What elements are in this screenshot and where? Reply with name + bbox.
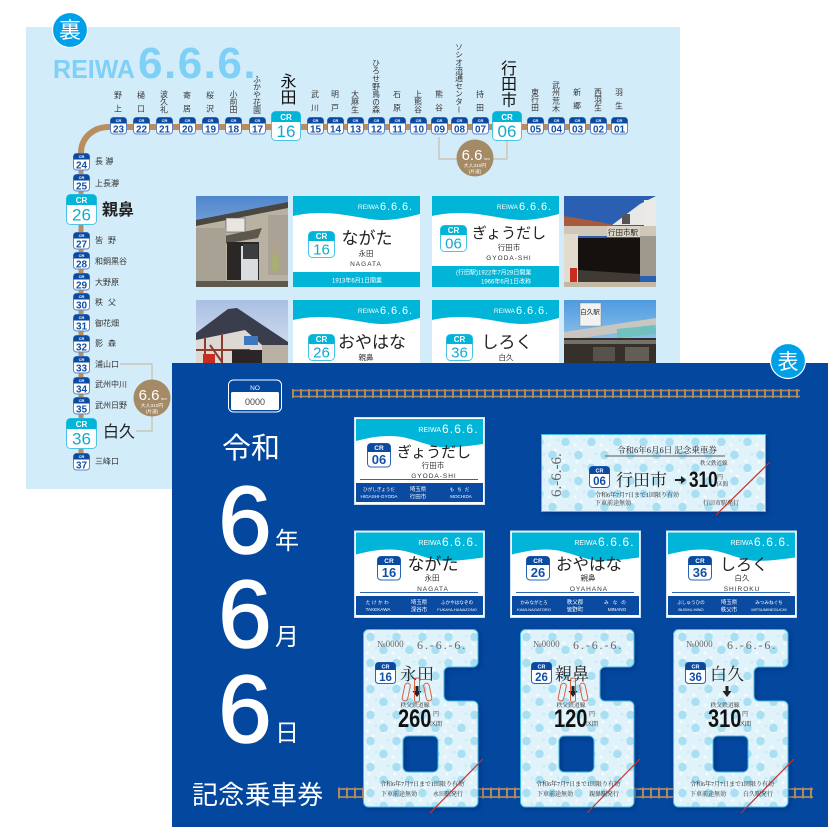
number box <box>228 380 282 412</box>
station badges: left column: CR <box>79 175 84 180</box>
station sign: Nagata: 埼玉県 <box>411 598 428 606</box>
station names: top row: 明戸 <box>330 90 340 118</box>
ticket: Shiroku six-shaped: 下車前途無効 <box>690 790 726 798</box>
ticket: Nagata six-shaped: 令和6年7月7日まで1回限り有効 <box>380 780 464 788</box>
station sign: Nagata: CR <box>384 558 394 565</box>
station badges: top row: CR <box>596 118 601 123</box>
station badges: left column: 24 <box>76 160 87 172</box>
station sign: Oyahana: おやはな <box>556 555 622 574</box>
title: 令和6年6月6日 記念乗車券: 記念乗車券 <box>192 780 324 810</box>
station sign: Oyahana: 親鼻 <box>580 572 596 582</box>
photo: Nagata station <box>196 196 288 287</box>
station sign: Nagata: ながた <box>408 555 458 574</box>
station sign: Oyahana <box>510 531 640 618</box>
station sign: Shiroku: MITSUMINEGUCHI <box>751 607 787 612</box>
ticket: Shiroku six-shaped: 区間 <box>739 720 751 728</box>
station badges: left column: CR <box>79 336 84 341</box>
ticket: Gyodashi long ticket: 区間 <box>717 480 729 488</box>
station names: left column: 白久 <box>103 423 135 441</box>
station card: Nagata: CR <box>316 232 327 241</box>
station card: Nagata: 16 <box>313 242 330 258</box>
station names: top row: 東行田 <box>530 87 540 112</box>
station badges: top row: 21 <box>159 124 170 136</box>
callout: 6.6 km fare, Shiroku <box>120 364 170 431</box>
station names: top row: 上熊谷 <box>413 90 422 114</box>
station names: top row: 桜沢 <box>205 90 214 119</box>
icon: back side badge 裏: 裏 <box>59 18 81 43</box>
ticket: Shiroku six-shaped: 秩父鉄道線 <box>710 701 740 709</box>
station sign: Gyodashi: 行田市 <box>410 492 427 500</box>
callout: 6.6 km fare, Shiroku: km <box>161 396 167 401</box>
station names: top row: 武州荒木 <box>551 80 560 113</box>
station badges: top row <box>110 112 628 141</box>
photo: Gyodashi station <box>564 196 656 287</box>
icon: back side badge 裏 <box>52 12 88 48</box>
station badges: left column: CR <box>79 454 84 459</box>
station names: left column: 大野原 <box>95 277 119 287</box>
ticket: Nagata six-shaped: 区間 <box>430 720 442 728</box>
station badges: left column: 29 <box>76 280 87 292</box>
callout: 6.6 km fare, Gyoda: 6.6 <box>462 147 482 164</box>
station card: Oyahana: 6.6.6. <box>380 305 413 317</box>
ticket: Nagata six-shaped: CR <box>382 664 389 670</box>
station sign: Nagata: 16 <box>382 565 396 580</box>
ticket: Gyodashi long ticket: 下車前途無効 <box>595 499 631 507</box>
station sign: Gyodashi: CR <box>374 445 384 452</box>
station badges: top row: CR <box>280 113 292 122</box>
ticket: Gyodashi long ticket: 行田市 <box>616 471 667 490</box>
station names: top row: 熊谷 <box>434 89 444 118</box>
ticket: Gyodashi long ticket: 秩父鉄道線 <box>700 459 728 467</box>
station names: top row <box>113 43 624 119</box>
station sign: Shiroku: CR <box>695 558 705 565</box>
ticket: Nagata six-shaped: 永田 <box>400 665 434 684</box>
station badges: left column: CR <box>79 274 84 279</box>
station badges: top row: 07 <box>475 124 486 136</box>
station names: top row: 武川 <box>310 89 320 118</box>
station sign: Oyahana: REIWA <box>574 540 597 547</box>
ticket: Shiroku six-shaped <box>674 630 794 813</box>
station sign: Gyodashi: MOCHIDA <box>450 494 473 499</box>
station badges: top row: CR <box>617 118 622 123</box>
station names: left column: 御花畑 <box>95 318 119 328</box>
station names: top row: 新郷 <box>572 88 582 116</box>
station sign: Oyahana: 6.6.6. <box>598 535 635 549</box>
track: top <box>292 390 800 396</box>
station sign: Shiroku: 秩父市 <box>721 606 738 614</box>
ticket: Shiroku six-shaped: 310 <box>708 705 741 733</box>
title: 令和6年6月6日 記念乗車券: 日 <box>275 720 299 747</box>
station sign: Nagata: NAGATA <box>417 586 449 593</box>
station sign: Gyodashi: 6.6.6. <box>442 422 479 436</box>
station sign: Gyodashi: ひがしぎょうだ <box>363 486 395 493</box>
station badges: top row: 22 <box>136 124 147 136</box>
station card: Gyodashi: 6.6.6. <box>519 201 552 213</box>
station badges: top row: CR <box>395 118 400 123</box>
ticket: Nagata six-shaped: 円 <box>433 711 439 718</box>
heading: REIWA 6.6.6.: REIWA <box>53 54 135 84</box>
heading: REIWA 6.6.6.: 6.6.6. <box>138 39 257 88</box>
station card: Shiroku: 36 <box>451 344 468 362</box>
station badges: top row: CR <box>457 118 462 123</box>
station sign: Shiroku: 埼玉県 <box>721 598 738 606</box>
ticket: Oyahana six-shaped <box>520 630 640 813</box>
station badges: top row: 11 <box>392 124 403 136</box>
station badges: left column: 28 <box>76 260 87 270</box>
station card: Nagata: 6.6.6. <box>380 201 413 213</box>
station badges: left column: 35 <box>76 404 87 416</box>
station sign: Oyahana: かみながとろ <box>520 599 548 606</box>
ticket: Gyodashi long ticket: 令和6年6月6日 記念乗車券 <box>617 445 717 455</box>
station card: Shiroku <box>432 300 559 364</box>
title: 令和6年6月6日 記念乗車券: 6 <box>218 656 272 763</box>
panel: back side <box>26 12 680 489</box>
station card: Nagata: ながた <box>342 229 392 248</box>
number box: 0000 <box>245 397 265 407</box>
callout: 6.6 km fare, Gyoda <box>439 137 507 176</box>
station card: Shiroku: CR <box>454 335 465 344</box>
ticket: Oyahana six-shaped: 令和6年7月7日まで1回限り有効 <box>536 780 620 788</box>
station names: top row: ひろせ野鳥の森 <box>371 59 380 115</box>
station names: top row: 小前田 <box>229 90 238 114</box>
ticket: Nagata six-shaped: 永田駅発行 <box>433 790 463 798</box>
station names: top row: ふかや花園 <box>252 75 262 115</box>
station sign: Nagata: REIWA <box>418 540 441 547</box>
station badges: top row: CR <box>208 118 213 123</box>
ticket: Oyahana six-shaped: 6.-6.-6. <box>573 638 623 652</box>
station sign: Shiroku: みつみねぐち <box>755 600 783 606</box>
callout: 6.6 km fare, Shiroku: 大人310円 <box>141 402 163 409</box>
station sign: Gyodashi: HIGASHI-GYODA <box>360 494 398 499</box>
station badges: left column: CR <box>79 154 84 159</box>
ticket: Gyodashi long ticket: 円 <box>717 474 723 481</box>
station badges: left column: 27 <box>76 240 87 250</box>
photo: Shiroku station <box>564 300 656 364</box>
station names: left column: 武州日野 <box>95 400 127 410</box>
station card: Oyahana: CR <box>316 335 327 344</box>
station badges: top row: CR <box>185 118 190 123</box>
station sign: Shiroku: 白久 <box>734 572 750 582</box>
station sign: Shiroku: REIWA <box>730 540 753 547</box>
ticket: Gyodashi long ticket: CR <box>596 468 603 474</box>
station names: top row: 行田市 <box>498 60 516 108</box>
station badges: left column: CR <box>79 398 84 403</box>
station sign: Oyahana: CR <box>533 558 543 565</box>
heading: REIWA 6.6.6. <box>53 39 257 88</box>
ticket: Oyahana six-shaped: 親鼻 <box>555 665 589 684</box>
station badges: top row: 19 <box>205 124 216 136</box>
title: 令和6年6月6日 記念乗車券: 年 <box>275 528 299 555</box>
ticket: Shiroku six-shaped: №0000 <box>686 639 713 649</box>
station badges: left column: CR <box>76 196 87 205</box>
station names: left column: 武州中川 <box>95 379 127 389</box>
ticket: Gyodashi long ticket: 行田市駅発行 <box>703 499 739 507</box>
station badges: top row: 16 <box>277 122 295 141</box>
station sign: Nagata: たけかわ <box>366 599 390 606</box>
track: bottom <box>338 789 813 797</box>
station sign: Shiroku: 36 <box>693 565 707 580</box>
station badges: left column: 26 <box>72 206 91 224</box>
ticket: Nagata six-shaped: 16 <box>379 672 392 684</box>
station names: left column: 浦山口 <box>95 359 119 369</box>
station names: top row: 石原 <box>392 90 402 118</box>
station names: top row: 波久礼 <box>159 89 168 114</box>
station names: left column: 上長瀞 <box>95 178 119 188</box>
station card: Nagata: REIWA <box>358 204 380 211</box>
station badges: top row: CR <box>437 118 442 123</box>
station names: left column: 皆野 <box>95 236 121 245</box>
station badges: top row: 18 <box>228 124 239 136</box>
ticket: Nagata six-shaped: №0000 <box>377 639 404 649</box>
station badges: left column: 37 <box>76 460 87 472</box>
station badges: top row: CR <box>416 118 421 123</box>
ticket: Shiroku six-shaped: 白久 <box>710 665 744 684</box>
ticket: Oyahana six-shaped: 親鼻駅発行 <box>589 790 619 798</box>
station card: Nagata <box>293 196 420 287</box>
station badges: top row: CR <box>255 118 260 123</box>
station sign: Oyahana: KAMI-NAGATORO <box>517 607 551 612</box>
photo: Gyodashi station: 行田市駅 <box>608 227 638 237</box>
station badges: left column <box>66 154 96 472</box>
station sign: Oyahana: 秩父郡 <box>567 598 584 606</box>
station badges: top row: 23 <box>113 124 124 136</box>
station card: Nagata: NAGATA <box>350 261 382 268</box>
icon: front side badge 表: 表 <box>778 351 798 374</box>
station card: Gyodashi: ぎょうだし <box>472 225 546 242</box>
station sign: Nagata <box>354 531 484 618</box>
station badges: left column: CR <box>79 357 84 362</box>
station sign: Gyodashi: GYODA-SHI <box>411 473 457 480</box>
station sign: Nagata: TAKEKAWA <box>366 607 391 612</box>
station badges: top row: 15 <box>310 124 321 136</box>
station sign: Nagata: FUKAYA-HANAZONO <box>437 607 477 612</box>
ticket: Oyahana six-shaped: 円 <box>589 711 595 718</box>
station card: Gyodashi: CR <box>448 226 459 235</box>
station sign: Nagata: 永田 <box>424 572 440 582</box>
station card: Oyahana: REIWA <box>358 308 380 315</box>
station badges: left column: 31 <box>76 322 87 332</box>
ticket: Gyodashi long ticket: 06 <box>593 476 606 488</box>
number box: NO <box>250 385 260 392</box>
ticket: Gyodashi long ticket <box>542 434 770 515</box>
station names: top row: 大麻生 <box>350 89 360 113</box>
station card: Gyodashi <box>432 196 559 287</box>
station badges: top row: CR <box>116 118 121 123</box>
station badges: top row: CR <box>478 118 483 123</box>
ticket: Oyahana six-shaped: CR <box>538 664 545 670</box>
station badges: top row: 03 <box>572 124 583 136</box>
station badges: top row: 20 <box>182 124 193 136</box>
callout: 6.6 km fare, Shiroku: 6.6 <box>139 387 159 404</box>
ticket: Oyahana six-shaped: 秩父鉄道線 <box>556 701 586 709</box>
station card: Shiroku: 白久 <box>498 352 514 362</box>
station badges: top row: CR <box>554 118 559 123</box>
station names: top row: 野上 <box>113 91 122 119</box>
callout: 6.6 km fare, Shiroku: (片道) <box>146 408 159 415</box>
station badges: left column: 32 <box>76 342 87 354</box>
station badges: top row: 04 <box>551 124 562 136</box>
station names: left column: 長 瀞 <box>95 156 113 166</box>
station badges: top row: CR <box>333 118 338 123</box>
station badges: top row: 06 <box>498 122 516 141</box>
station sign: Oyahana: みなの <box>604 599 630 606</box>
station names: top row: 羽生 <box>614 88 624 116</box>
station badges: left column: 36 <box>72 430 91 448</box>
ticket: Gyodashi long ticket: 令和6年7月7日まで1回限り有効 <box>595 491 679 499</box>
ticket: Oyahana six-shaped: 26 <box>535 672 548 684</box>
title: 令和6年6月6日 記念乗車券 <box>192 432 324 810</box>
station sign: Gyodashi <box>354 418 484 504</box>
station card: Gyodashi: 06 <box>445 236 462 252</box>
ticket: Shiroku six-shaped: 円 <box>742 711 748 718</box>
station badges: top row: CR <box>575 118 580 123</box>
station names: top row: 永田 <box>278 73 296 105</box>
station sign: Shiroku: 6.6.6. <box>754 535 791 549</box>
station card: Oyahana: 親鼻 <box>358 352 374 362</box>
station names: top row: 持田 <box>475 89 484 118</box>
station names: top row: 寄居 <box>182 90 192 119</box>
station badges: left column: 30 <box>76 300 87 312</box>
station card: Shiroku: 6.6.6. <box>516 305 549 317</box>
station card: Oyahana: 26 <box>313 344 330 362</box>
station sign: Gyodashi: 埼玉県 <box>410 485 427 493</box>
station card: Nagata: 1913年6月1日開業 <box>332 276 382 284</box>
station names: top row: 樋口 <box>136 90 146 119</box>
title: 令和6年6月6日 記念乗車券: 6 <box>218 467 272 574</box>
station card: Oyahana <box>293 300 420 364</box>
station sign: Shiroku: SHIROKU <box>724 586 760 593</box>
ticket: Shiroku six-shaped: 白久駅発行 <box>743 790 773 798</box>
station badges: top row: CR <box>374 118 379 123</box>
station card: Gyodashi: 1966年6月1日改称 <box>481 278 531 286</box>
station sign: Nagata: 深谷市 <box>411 606 428 614</box>
ticket: Shiroku six-shaped: 36 <box>689 672 702 684</box>
station badges: top row: CR <box>533 118 538 123</box>
photo: Oyahana station <box>196 300 288 364</box>
ticket: Nagata six-shaped <box>364 630 483 813</box>
station sign: Gyodashi: REIWA <box>418 427 441 434</box>
station badges: top row: CR <box>139 118 144 123</box>
station badges: left column: 34 <box>76 384 87 396</box>
station sign: Nagata: 6.6.6. <box>442 535 479 549</box>
station badges: top row: 13 <box>350 124 361 136</box>
panel: front side <box>172 344 828 827</box>
station sign: Shiroku: BUSHU-HINO <box>678 607 704 612</box>
station badges: left column: CR <box>79 253 84 258</box>
title: 令和6年6月6日 記念乗車券: 6 <box>218 561 272 668</box>
station sign: Oyahana: MINANO <box>608 607 627 612</box>
station card: Gyodashi: REIWA <box>497 204 519 211</box>
ticket: Nagata six-shaped: 下車前途無効 <box>381 790 417 798</box>
station names: top row: 西羽生 <box>593 88 602 111</box>
station names: left column: 影森 <box>95 338 121 348</box>
station badges: left column: CR <box>76 420 87 429</box>
station sign: Shiroku <box>666 531 796 618</box>
station card: Shiroku: しろく <box>482 333 532 352</box>
station sign: Gyodashi: もちだ <box>450 487 472 493</box>
callout: 6.6 km fare, Gyoda: 大人310円 <box>464 162 486 169</box>
station badges: left column: 25 <box>76 182 87 192</box>
station names: left column: 親鼻 <box>102 200 134 219</box>
station badges: left column: CR <box>79 315 84 320</box>
ticket: Nagata six-shaped: 秩父鉄道線 <box>400 701 430 709</box>
ticket: Shiroku six-shaped: 6.-6.-6. <box>727 638 777 652</box>
station badges: top row: CR <box>231 118 236 123</box>
station card: Nagata: 永田 <box>358 248 374 258</box>
station badges: top row: CR <box>162 118 167 123</box>
station sign: Shiroku: しろく <box>720 557 768 574</box>
station sign: Gyodashi: ぎょうだし <box>397 444 471 461</box>
ticket: Nagata six-shaped: 260 <box>398 705 431 733</box>
station badges: top row: 05 <box>530 124 541 136</box>
station card: Shiroku: REIWA <box>494 308 516 315</box>
callout: 6.6 km fare, Gyoda: km <box>484 156 490 161</box>
station badges: top row: CR <box>353 118 358 123</box>
station sign: Oyahana: OYAHANA <box>570 586 608 593</box>
station names: left column <box>95 156 135 466</box>
title: 令和6年6月6日 記念乗車券: 月 <box>275 624 299 651</box>
ticket: Oyahana six-shaped: №0000 <box>533 639 560 649</box>
station names: left column: 和銅黒谷 <box>95 256 127 266</box>
ticket: Nagata six-shaped: 6.-6.-6. <box>417 638 467 652</box>
station badges: top row: 09 <box>434 124 445 136</box>
station names: left column: 秩父 <box>95 297 121 307</box>
station names: top row: ソシオ流通センター <box>454 43 464 113</box>
station card: Gyodashi: (行田駅)1922年7月28日開業 <box>456 268 531 276</box>
station badges: top row: 12 <box>371 124 382 136</box>
station card: Gyodashi: GYODA-SHI <box>486 255 532 262</box>
ticket: Oyahana six-shaped: 区間 <box>586 720 598 728</box>
icon: front side badge 表 <box>770 344 806 378</box>
ticket: Shiroku six-shaped: CR <box>692 664 699 670</box>
ticket: Gyodashi long ticket: 310 <box>689 468 718 493</box>
station badges: top row: 08 <box>454 124 465 136</box>
station sign: Oyahana: 26 <box>531 565 545 580</box>
station badges: top row: 14 <box>330 124 341 136</box>
station sign: Gyodashi: 06 <box>372 452 386 467</box>
ticket: Shiroku six-shaped: 令和6年7月7日まで1回限り有効 <box>690 780 774 788</box>
station badges: top row: 17 <box>252 124 263 136</box>
title: 令和6年6月6日 記念乗車券: 令和 <box>222 432 280 465</box>
station sign: Nagata: ふかやはなぞの <box>441 599 473 606</box>
station badges: top row: CR <box>501 113 513 122</box>
ticket: Gyodashi long ticket: 6.-6.-6. <box>549 453 565 497</box>
station badges: left column: CR <box>79 294 84 299</box>
station badges: top row: 01 <box>614 124 625 136</box>
station badges: top row: CR <box>313 118 318 123</box>
station names: left column: 三峰口 <box>95 456 119 466</box>
station badges: left column: CR <box>79 378 84 383</box>
callout: 6.6 km fare, Gyoda: (片道) <box>469 168 482 175</box>
photo: Shiroku station: 白久駅 <box>580 307 600 316</box>
station sign: Oyahana: 皆野町 <box>567 606 584 614</box>
station sign: Shiroku: ぶしゅうひの <box>677 600 705 606</box>
ticket: Oyahana six-shaped: 下車前途無効 <box>537 790 573 798</box>
station card: Gyodashi: 行田市 <box>498 242 521 252</box>
route line <box>81 127 620 460</box>
station badges: top row: 10 <box>413 124 424 136</box>
station badges: left column: 33 <box>76 364 87 374</box>
station sign: Gyodashi: 行田市 <box>422 460 445 470</box>
station badges: left column: CR <box>79 233 84 238</box>
station card: Oyahana: おやはな <box>338 333 406 352</box>
station badges: top row: 02 <box>593 124 604 136</box>
ticket: Oyahana six-shaped: 120 <box>554 705 587 733</box>
